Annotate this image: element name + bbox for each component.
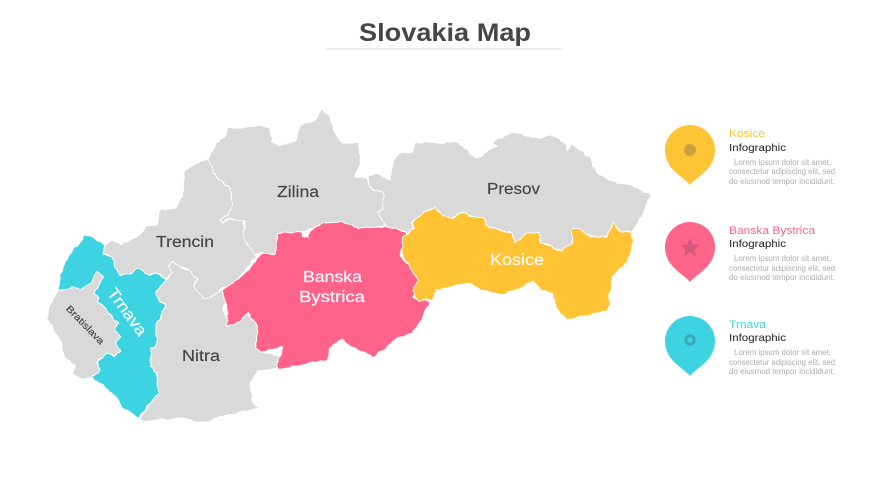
title: Slovakia Map: [359, 19, 531, 47]
legend text: Banska Bystrica: Banska Bystrica: [729, 225, 816, 237]
legend text: Kosice: Infographic: [729, 142, 786, 154]
legend text: Trnava: Infographic: [729, 332, 786, 344]
region: Nitra: [139, 262, 282, 423]
legend item: Banska Bystrica: [665, 222, 835, 282]
icon: teal map pin with ring: [665, 316, 715, 376]
region: Nitra: Nitra: [182, 348, 220, 365]
region: Kosice: [402, 208, 632, 320]
legend text: Kosice: consectetur adipiscing elit, sed: [729, 167, 835, 176]
legend text: Trnava: do eiusmod tempor incididunt.: [729, 367, 835, 376]
legend text: Kosice: Kosice: [729, 128, 765, 140]
region: Banska Bystrica: Banska: [303, 269, 362, 286]
legend item: Trnava: [665, 316, 835, 376]
legend text: Kosice: do eiusmod tempor incididunt.: [729, 177, 835, 186]
region: Banska Bystrica: [222, 222, 430, 369]
region: Kosice: Kosice: [490, 252, 544, 269]
icon: pink map pin with star: [665, 222, 715, 282]
region: Bratislava: [47, 272, 121, 378]
legend text: Banska Bystrica: Infographic: [729, 238, 786, 250]
legend text: Trnava: Trnava: [729, 319, 767, 331]
region: Presov: [368, 133, 650, 251]
legend text: Banska Bystrica: Lorem ipsum dolor sit amet,: [734, 254, 831, 263]
legend text: Banska Bystrica: consectetur adipiscing elit, sed: [729, 264, 835, 273]
legend text: Trnava: Lorem ipsum dolor sit amet,: [734, 348, 831, 357]
icon: yellow map pin: [665, 125, 715, 185]
legend text: Banska Bystrica: [729, 225, 835, 282]
region: Bratislava: Bratislava: [63, 304, 107, 348]
legend text: Trnava: consectetur adipiscing elit, sed: [729, 358, 835, 367]
region: Zilina: [208, 108, 386, 255]
legend text: Kosice: Lorem ipsum dolor sit amet,: [734, 158, 831, 167]
region: Trencin: Trencin: [156, 234, 214, 251]
region: Trnava: Trnava: [104, 285, 150, 340]
region: Trnava: [58, 235, 167, 419]
region: Banska Bystrica: Bystrica: [299, 289, 365, 306]
region: Trencin: [103, 158, 257, 298]
legend text: Kosice: [729, 128, 835, 186]
legend text: Banska Bystrica: do eiusmod tempor incididunt.: [729, 273, 835, 282]
legend item: Kosice: [665, 125, 835, 186]
region: Presov: Presov: [487, 181, 540, 198]
legend text: Trnava: [729, 319, 835, 376]
region: Zilina: Zilina: [277, 184, 319, 201]
map of Slovakia: [47, 108, 650, 423]
